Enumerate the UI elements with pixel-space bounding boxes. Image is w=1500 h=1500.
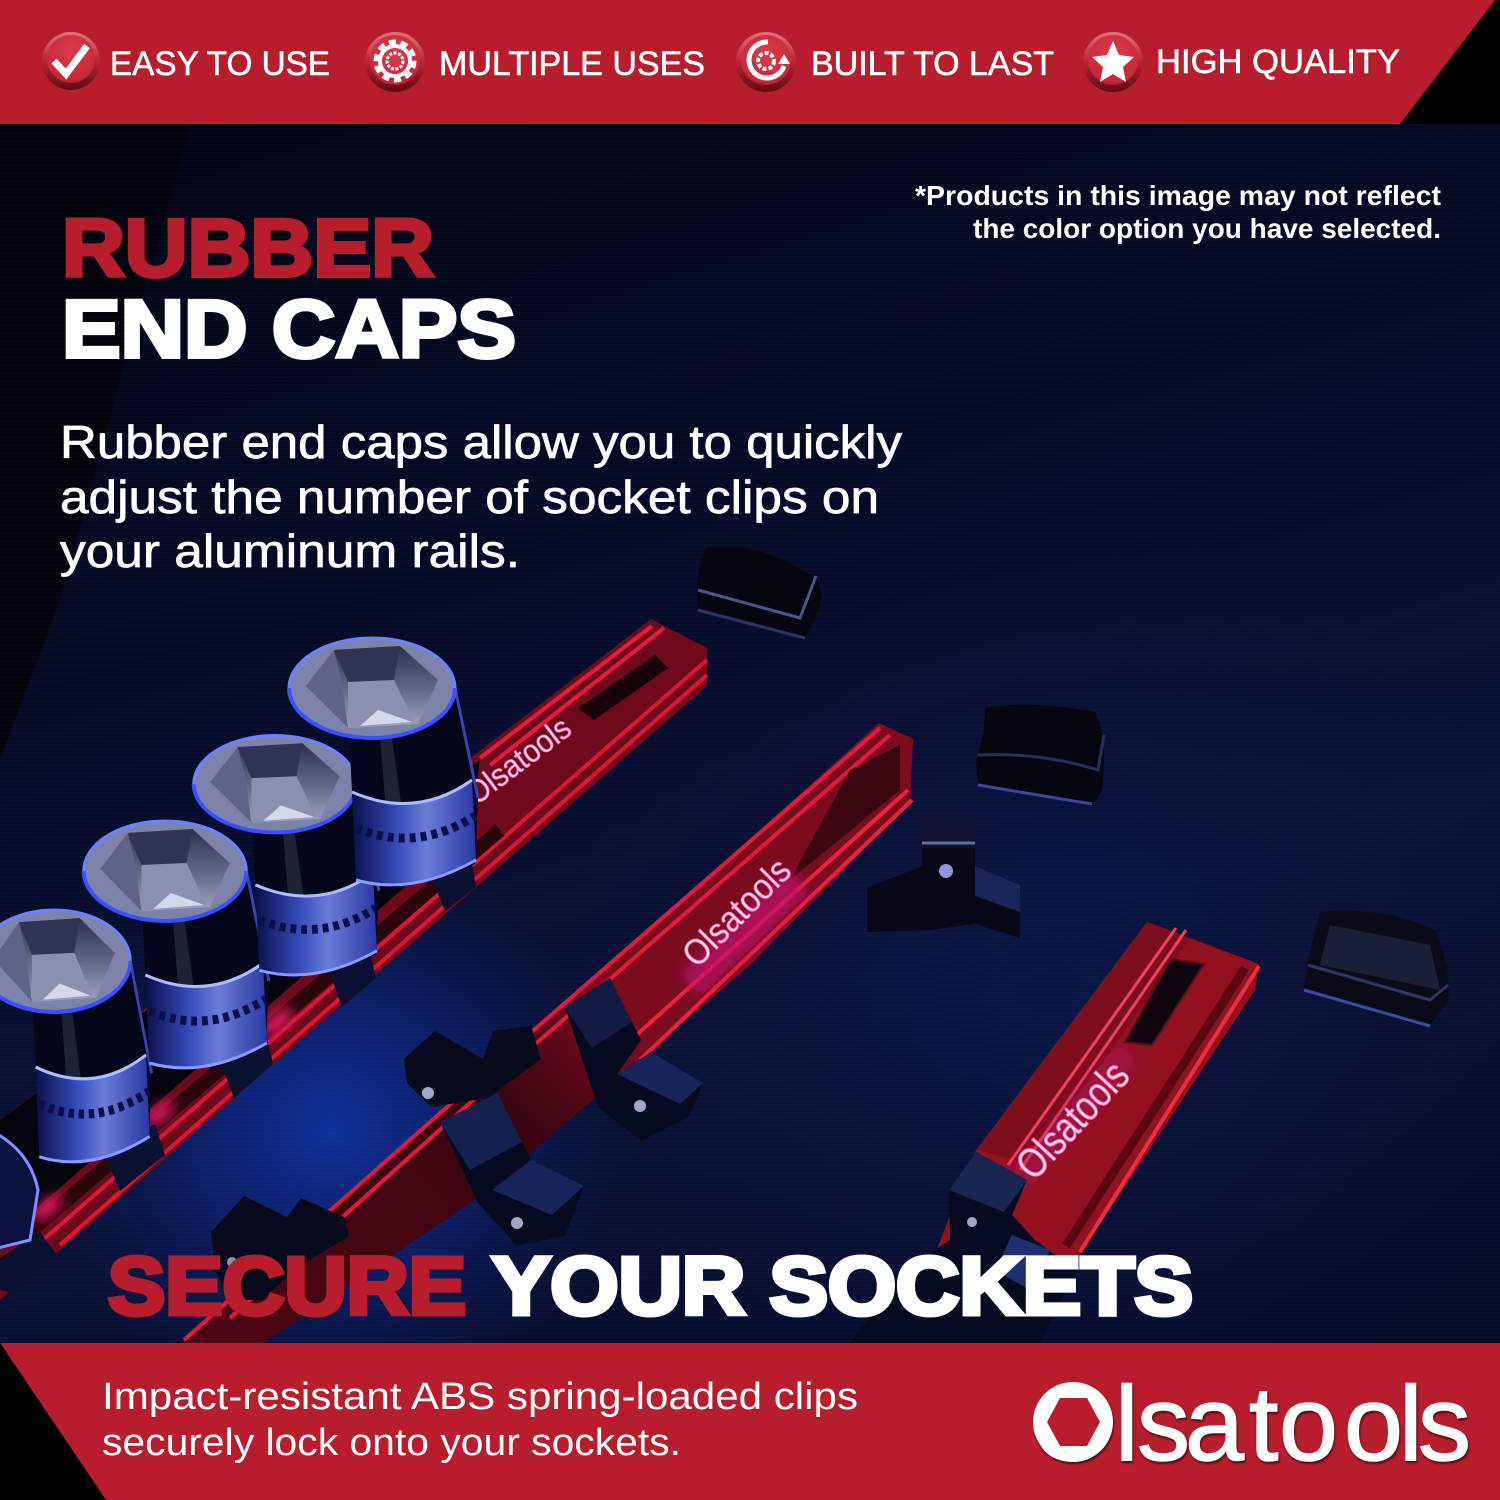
top banner — [0, 0, 1500, 124]
slogan: secure your sockets — [108, 1241, 1193, 1332]
end cap 3 — [1304, 911, 1449, 1026]
rail logo: Olsatools: Olsatools — [674, 849, 799, 975]
socket 3 — [84, 821, 269, 1068]
brand logo: Olsatools: Olsatools — [1031, 1365, 1471, 1483]
icon: check — [42, 32, 100, 90]
rail reflections — [29, 1002, 298, 1226]
end cap 1 — [697, 547, 821, 638]
socket 2 — [194, 736, 379, 975]
loose socket clip — [867, 815, 1020, 938]
socket 4 — [0, 910, 152, 1162]
rail logo: Olsatools: Olsatools — [1006, 1052, 1138, 1188]
label: multiple uses: MULTIPLE USES — [439, 45, 705, 83]
chrome sockets — [0, 638, 478, 1250]
rail: centre — [182, 723, 913, 1343]
small clips under sockets — [0, 858, 476, 1294]
icon: gear — [365, 32, 425, 92]
icon: star — [1083, 32, 1143, 92]
disclaimer note: *Products in this image may not reflect — [915, 180, 1441, 211]
socket clips on rails — [0, 858, 1075, 1343]
banner description — [102, 1376, 858, 1464]
body text — [60, 416, 902, 577]
rail logo: Olsatools: Olsatools — [459, 709, 578, 812]
clip A — [565, 978, 703, 1141]
rail: left with sockets — [0, 619, 707, 1300]
banner description: securely lock onto your sockets. — [102, 1422, 681, 1464]
body text: adjust the number of socket clips on — [60, 471, 879, 523]
heading: rubber end caps: RUBBER — [62, 203, 434, 294]
disclaimer note — [915, 180, 1441, 244]
disclaimer note: the color option you have selected. — [973, 213, 1441, 244]
clip C — [440, 1093, 584, 1246]
heading: rubber end caps: END CAPS — [62, 284, 516, 375]
partial socket at edge — [0, 1130, 38, 1250]
icon: circular arrow gear — [736, 32, 796, 92]
clip D — [211, 1196, 349, 1300]
body text: Rubber end caps allow you to quickly — [60, 416, 902, 468]
body text: your aluminum rails. — [60, 525, 520, 577]
clip B — [404, 1026, 541, 1107]
label: high quality: HIGH QUALITY — [1156, 43, 1400, 81]
bottom banner — [0, 1343, 1500, 1500]
socket 1 — [289, 638, 478, 885]
rubber end caps — [697, 547, 1449, 1026]
banner description: Impact-resistant ABS spring-loaded clips — [102, 1376, 858, 1418]
label: easy to use: EASY TO USE — [110, 45, 330, 83]
rail: right — [900, 922, 1259, 1343]
clip E — [850, 1152, 1075, 1343]
slogan: secure your sockets: YOUR SOCKETS — [492, 1241, 1193, 1332]
slogan: secure your sockets: SECURE — [108, 1241, 466, 1332]
heading: rubber end caps — [62, 203, 516, 375]
label: built to last: BUILT TO LAST — [811, 45, 1054, 83]
end cap 2 — [976, 705, 1104, 806]
